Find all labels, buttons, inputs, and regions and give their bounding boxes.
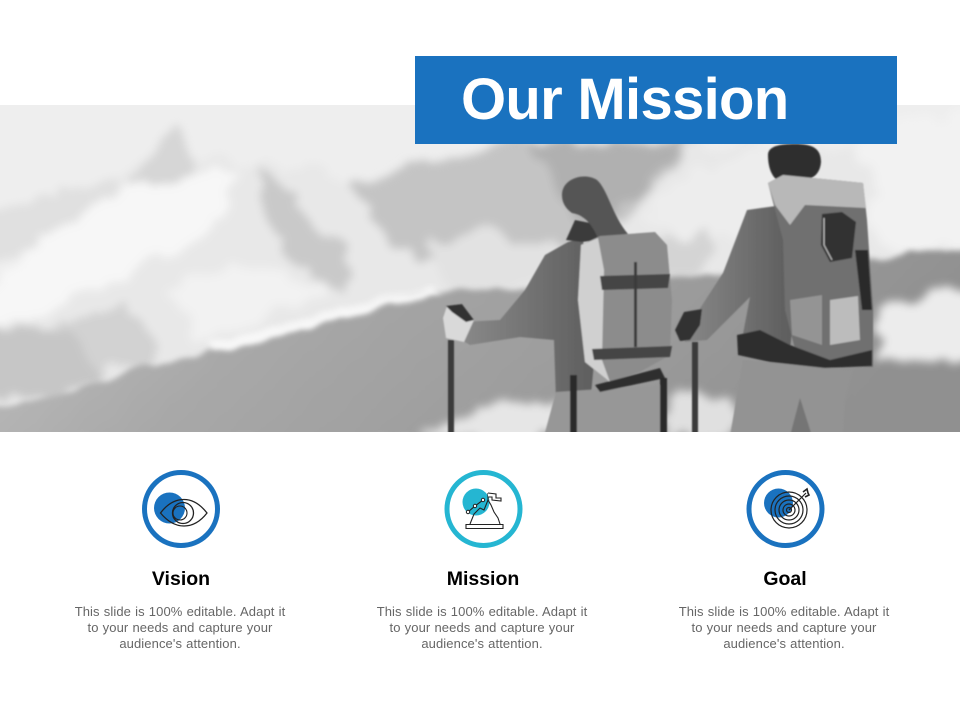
description: to your needs and capture your: [390, 620, 574, 635]
hiker: man: [675, 144, 873, 436]
title banner: [415, 56, 897, 144]
label: Goal: [763, 568, 807, 590]
description: This slide is 100% editable. Adapt it: [377, 604, 587, 619]
far mountains: [0, 126, 719, 405]
hiker: woman: [443, 176, 672, 436]
man jacket and arm: [686, 206, 792, 346]
description: This slide is 100% editable. Adapt it: [679, 604, 889, 619]
panel: Vision: [75, 470, 286, 651]
description: [377, 604, 588, 651]
label: Vision: [152, 568, 210, 590]
description: to your needs and capture your: [692, 620, 876, 635]
panel: Mission: [377, 470, 588, 651]
woman backpack: [580, 232, 672, 382]
snow patches lower: [420, 285, 960, 440]
description: audience's attention.: [723, 636, 845, 651]
snow ridge line: [207, 286, 440, 353]
icon: target with arrow: [746, 470, 824, 548]
panel: Goal: [679, 470, 890, 651]
man glove: [675, 309, 702, 341]
description: audience's attention.: [421, 636, 543, 651]
description: This slide is 100% editable. Adapt it: [75, 604, 285, 619]
sky: [0, 105, 960, 274]
woman jeans: [544, 385, 662, 436]
description: [75, 604, 286, 651]
man pole: [692, 342, 698, 435]
icon: eye: [142, 470, 220, 548]
heading: Our Mission: Our Mission: [461, 67, 788, 132]
man trousers: [730, 361, 838, 432]
description: [679, 604, 890, 651]
woman hair and collar: [565, 219, 598, 243]
label: Mission: [447, 568, 519, 590]
forest slope: [0, 245, 960, 440]
woman glove and pole: [443, 304, 474, 342]
description: audience's attention.: [119, 636, 241, 651]
man backpack: [768, 175, 873, 367]
man hair: [768, 144, 821, 182]
icon: mountain with flag: [444, 470, 522, 548]
description: to your needs and capture your: [88, 620, 272, 635]
woman jacket and arm: [464, 240, 594, 392]
photo: two hikers facing snowy mountains: [0, 105, 960, 432]
